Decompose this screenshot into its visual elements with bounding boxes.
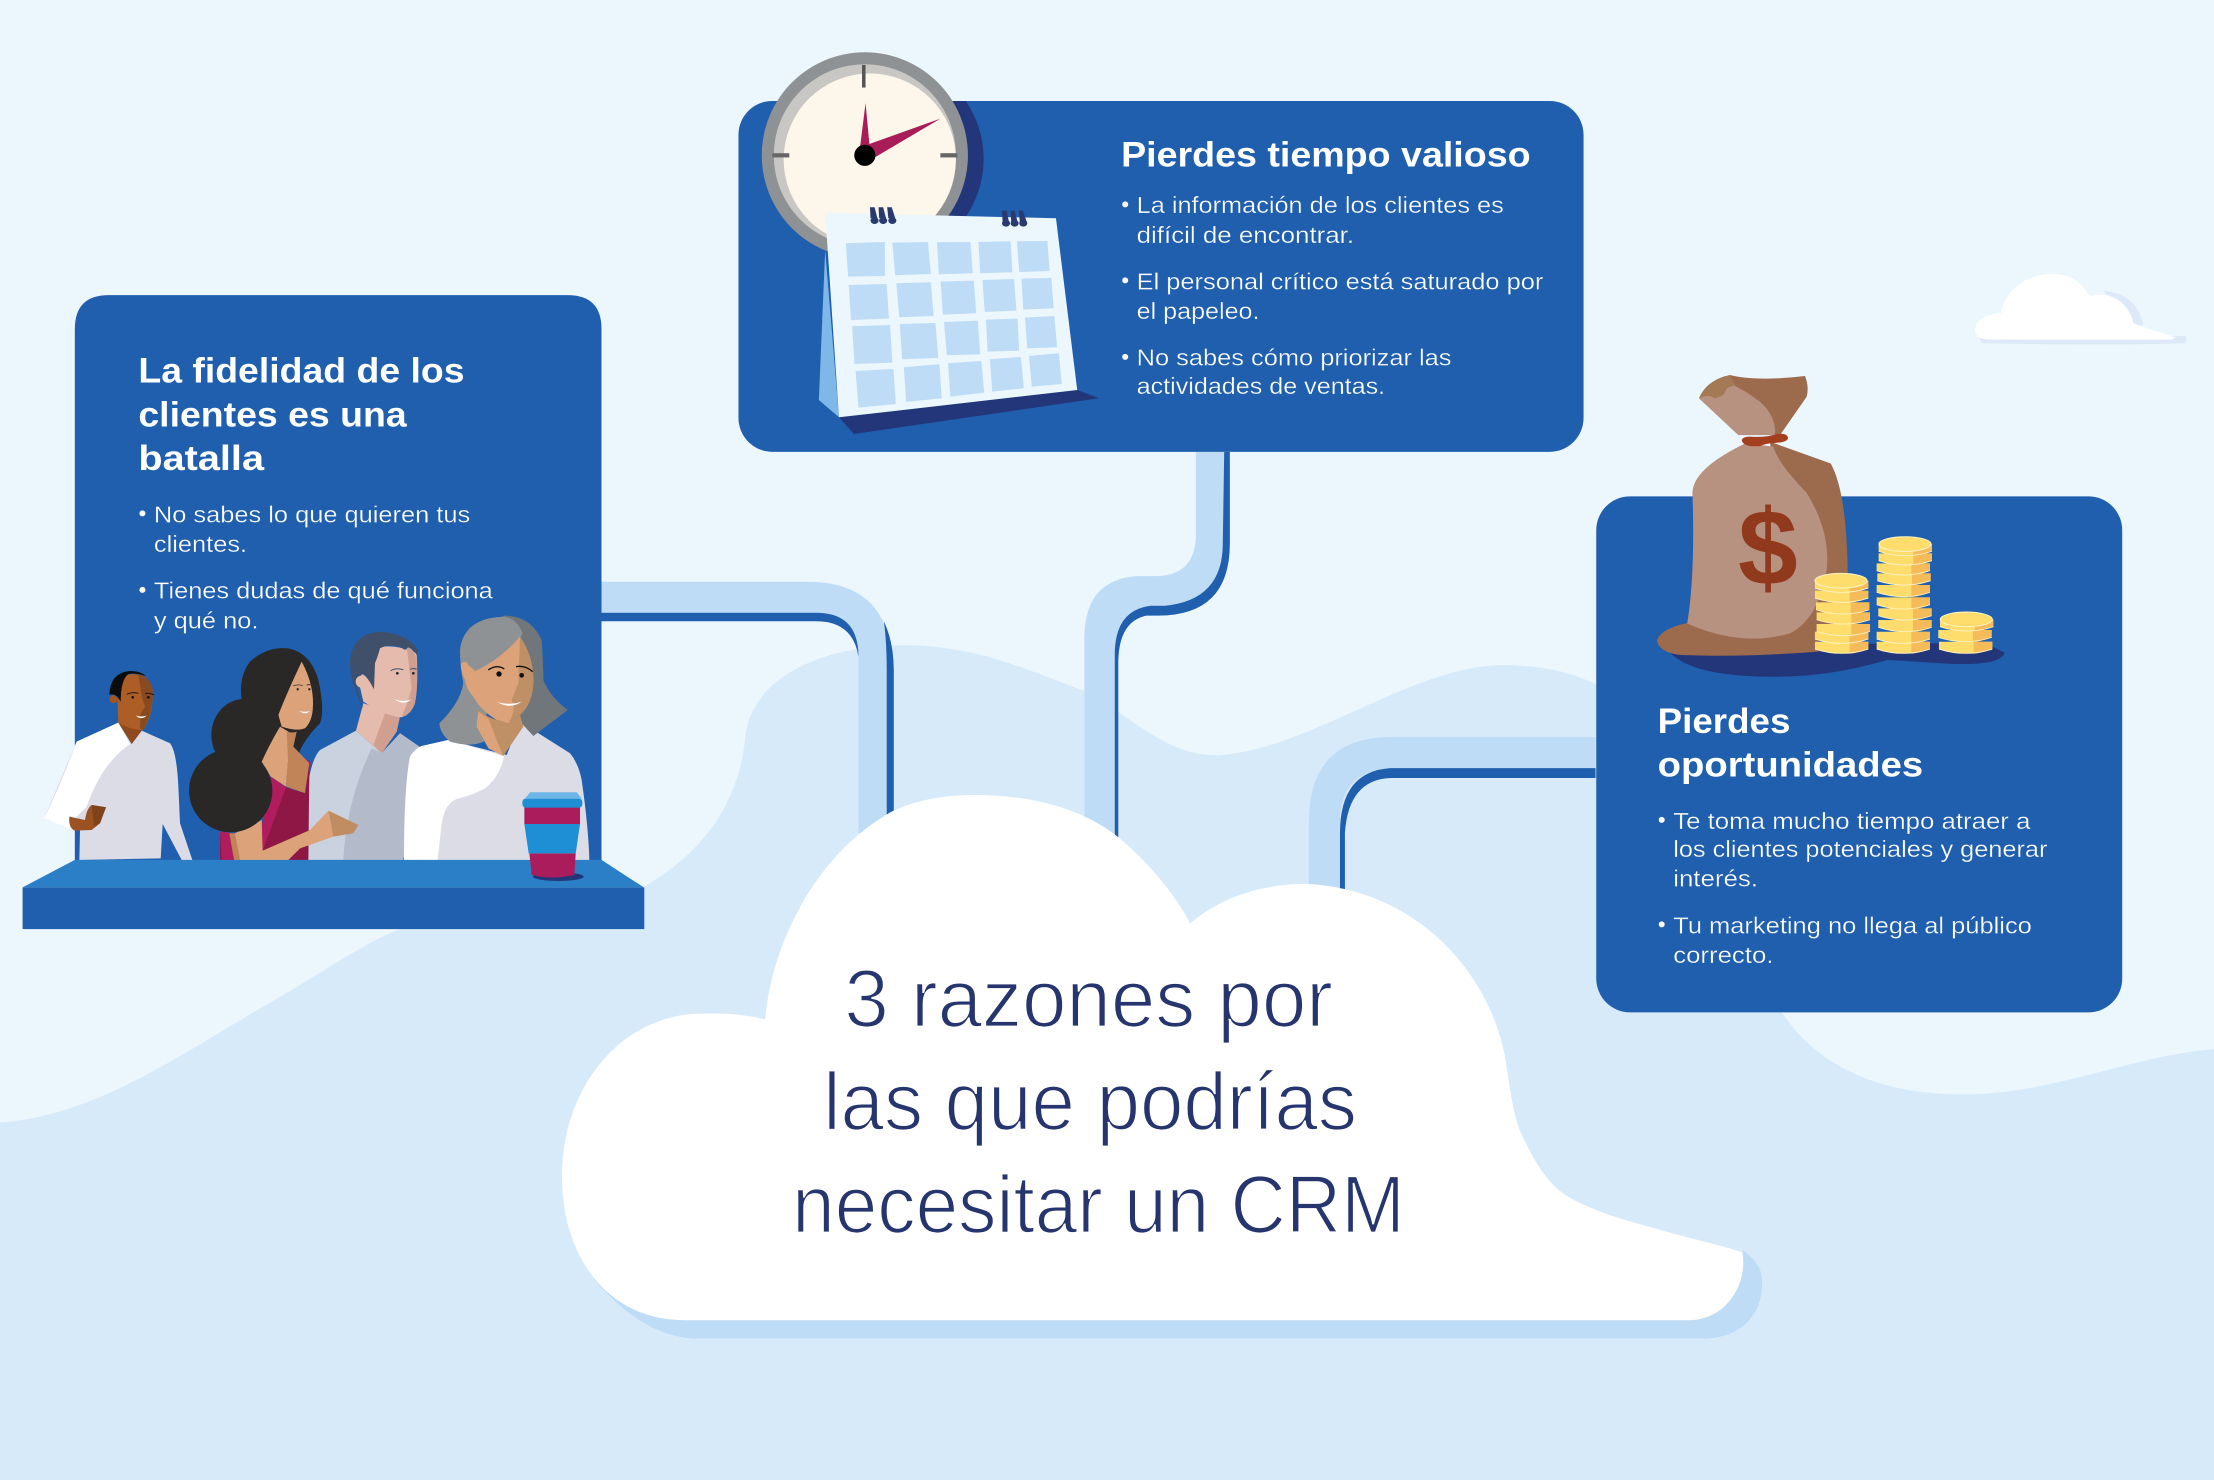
bullet list: opportunities: • [1658,911,1666,937]
person: woman with grey hair [404,616,589,860]
coin stacks [1815,537,1993,654]
central cloud shadow [593,1251,1762,1339]
bullet list: opportunities: interés. [1673,866,1758,892]
woman with dark hair [189,648,358,860]
person: man on the left and woman with dark hair [44,648,358,860]
panel: loyalty [75,295,602,875]
heading: loyalty: clientes es una [138,395,407,434]
panel background [738,101,1584,452]
icon: money bag [1657,375,2005,677]
bullet list: time: La información de los clientes es [1137,192,1504,218]
bullet list: loyalty: • [138,576,147,602]
bullet list: time [1121,191,1544,399]
title: 3 razones por [844,954,1333,1045]
panel: time [738,52,1584,452]
bullet list: time: No sabes cómo priorizar las [1137,345,1452,371]
heading: loyalty: La fidelidad de los [138,352,465,391]
bullet list: opportunities: • [1658,806,1666,832]
small cloud [1975,274,2186,345]
icon: calendar [819,207,1099,434]
connector pipe: loyalty panel to cloud [602,582,894,833]
bullet list: loyalty: y qué no. [154,607,258,633]
icon: coffee cup [522,792,584,881]
bullet list: opportunities [1658,806,2048,968]
bullet list: time: • [1121,191,1129,217]
background hills [0,645,2214,1480]
panel background [75,295,602,875]
bullet list: time: • [1121,343,1129,369]
connector pipe: opportunities panel to cloud [1309,737,1596,890]
heading: opportunities: Pierdes [1658,702,1790,741]
bullet list: time: actividades de ventas. [1137,373,1385,399]
people illustration [44,616,589,860]
icon: clock [762,52,984,258]
bullet list: loyalty: • [138,500,147,526]
dollar sign: $ [1738,488,1798,608]
connector pipe: time panel to cloud [1084,452,1230,840]
bullet list: opportunities: Tu marketing no llega al público [1673,912,2032,938]
man on the left [44,671,192,860]
bullet list: time: El personal crítico está saturado por [1137,268,1544,294]
bullet list: time: • [1121,267,1129,293]
bullet list: time: difícil de encontrar. [1137,222,1354,248]
bullet list: loyalty: No sabes lo que quieren tus [154,501,470,527]
bullet list: loyalty [138,500,493,633]
title: necesitar un CRM [792,1160,1405,1251]
bag neck and tie [1699,375,1808,446]
bullet list: loyalty: clientes. [154,531,247,557]
central cloud [562,795,1743,1320]
title: las que podrías [823,1057,1357,1148]
panel: opportunities [1596,375,2122,1012]
counter [23,860,644,929]
heading: loyalty [138,352,465,478]
bullet list: opportunities: los clientes potenciales y generar [1673,836,2048,862]
heading: time: Pierdes tiempo valioso [1121,136,1531,175]
panel background [1596,496,2122,1012]
heading: opportunities [1658,702,1923,785]
heading: loyalty: batalla [138,439,264,478]
bullet list: opportunities: Te toma mucho tiempo atraer a [1673,808,2030,834]
bullet list: loyalty: Tienes dudas de qué funciona [154,578,493,604]
bullet list: opportunities: correcto. [1673,942,1773,968]
title [792,954,1405,1251]
bullet list: time: el papeleo. [1137,298,1259,324]
heading: opportunities: oportunidades [1658,746,1923,785]
person: man in grey shirt [307,632,419,860]
